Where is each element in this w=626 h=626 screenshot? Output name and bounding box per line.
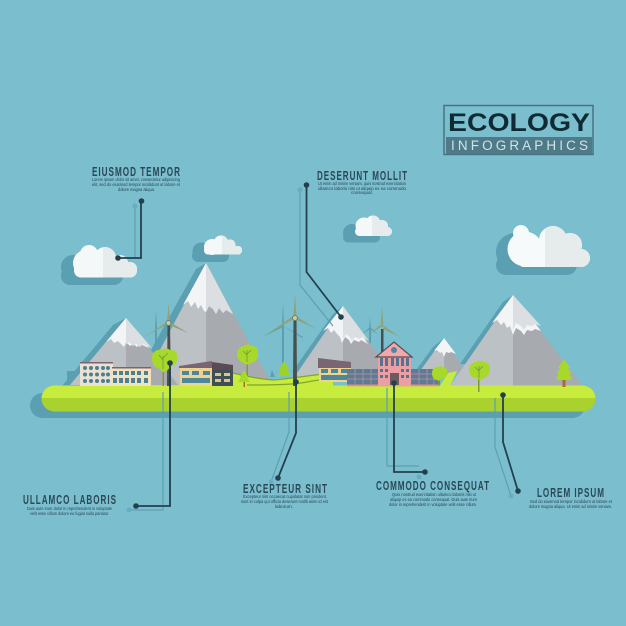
text block: ullamco laboris: ULLAMCO LABORIS — [23, 493, 117, 507]
tree: pine right — [556, 359, 572, 387]
pointer shadows — [126, 188, 514, 512]
title badge: INFOGRAPHICS — [451, 138, 588, 153]
cloud right — [496, 225, 590, 275]
text block: deserunt mollit: DESERUNT MOLLIT — [317, 169, 408, 183]
tree: pine behind — [278, 361, 290, 376]
pointer: lorem ipsum — [500, 392, 521, 494]
title badge: ECOLOGY — [448, 109, 590, 137]
far wind turbines — [155, 302, 379, 377]
building: pink school — [347, 342, 440, 386]
pointer: ullamco laboris — [133, 360, 173, 509]
text block: deserunt mollit — [317, 169, 408, 195]
text block: excepteur sint: EXCEPTEUR SINT — [243, 482, 328, 496]
text block: ullamco laboris: Duis aute irure dolor in reprehenderit in voluptate — [27, 506, 113, 511]
text block: eiusmod tempor: dolore magna aliqua. — [118, 187, 155, 192]
building: offices left — [80, 362, 151, 386]
text block: lorem ipsum: dolore magna aliqua. Ut enim ad minim veniam. — [529, 504, 612, 509]
tree: small pine left — [238, 370, 250, 387]
text block: commodo consequat — [376, 479, 490, 507]
text block: lorem ipsum — [529, 486, 613, 509]
mountain: centre — [295, 306, 390, 382]
mountain: large right — [450, 295, 583, 386]
wind turbine left — [144, 303, 188, 386]
mountain: small left — [70, 318, 178, 385]
text block: deserunt mollit: consequat. — [351, 190, 373, 195]
mountain shadows — [62, 263, 513, 386]
pointer: eiusmod tempor — [115, 198, 144, 261]
tree: by school — [432, 366, 447, 385]
cloud upper right — [343, 216, 392, 242]
text block: commodo consequat: COMMODO CONSEQUAT — [376, 479, 490, 493]
building: house centre — [318, 358, 351, 382]
text block: eiusmod tempor: elit, sed do eiusmod tempor incididunt ut labore et — [92, 182, 181, 187]
text block: eiusmod tempor — [92, 165, 181, 192]
green hills — [233, 371, 457, 386]
text block: deserunt mollit: ullamco laboris nisi ut aliquip ex ea commodo — [318, 186, 407, 191]
text block: ullamco laboris: velit esse cillum dolore eu fugiat nulla pariatur. — [30, 511, 109, 516]
mountain: big left — [141, 263, 273, 386]
pointer: excepteur sint — [275, 379, 299, 481]
text block: commodo consequat: dolor in reprehenderit in voluptate velit esse cillum. — [389, 502, 477, 507]
text block: lorem ipsum: Sed do eiusmod tempor incididunt ut labore et — [530, 499, 613, 504]
text block: eiusmod tempor: Lorem ipsum dolor sit amet, consectetur adipisicing — [92, 177, 181, 182]
text block: excepteur sint — [241, 482, 329, 509]
tree: centre — [237, 344, 258, 376]
text block: ullamco laboris — [23, 493, 117, 516]
title badge — [444, 106, 593, 154]
cloud left — [61, 245, 137, 285]
building: house left — [179, 361, 233, 386]
mountain: small right — [420, 338, 466, 376]
cloud middle — [192, 236, 242, 262]
pointer: deserunt mollit — [304, 182, 344, 320]
tree: left large — [152, 348, 177, 386]
platform shadow — [30, 393, 585, 418]
text block: excepteur sint: sunt in culpa qui officia deserunt mollit anim id est — [241, 499, 329, 504]
text block: commodo consequat: Quis nostrud exercitation ullamco laboris nisi ut — [392, 492, 477, 497]
platform — [42, 386, 596, 412]
text block: eiusmod tempor: EIUSMOD TEMPOR — [92, 165, 181, 179]
tree: right — [469, 361, 490, 392]
text block: excepteur sint: laborum. — [275, 504, 293, 509]
wind turbine right — [368, 306, 400, 352]
wind turbine centre — [263, 293, 316, 386]
text block: deserunt mollit: Ut enim ad minim veniam, quis nostrud exercitation — [318, 181, 407, 186]
text block: excepteur sint: Excepteur sint occaecat cupidatat non proident, — [243, 494, 327, 499]
pointer: commodo consequat — [391, 380, 428, 475]
text block: commodo consequat: aliquip ex ea commodo consequat. Duis aute irure — [390, 497, 478, 502]
